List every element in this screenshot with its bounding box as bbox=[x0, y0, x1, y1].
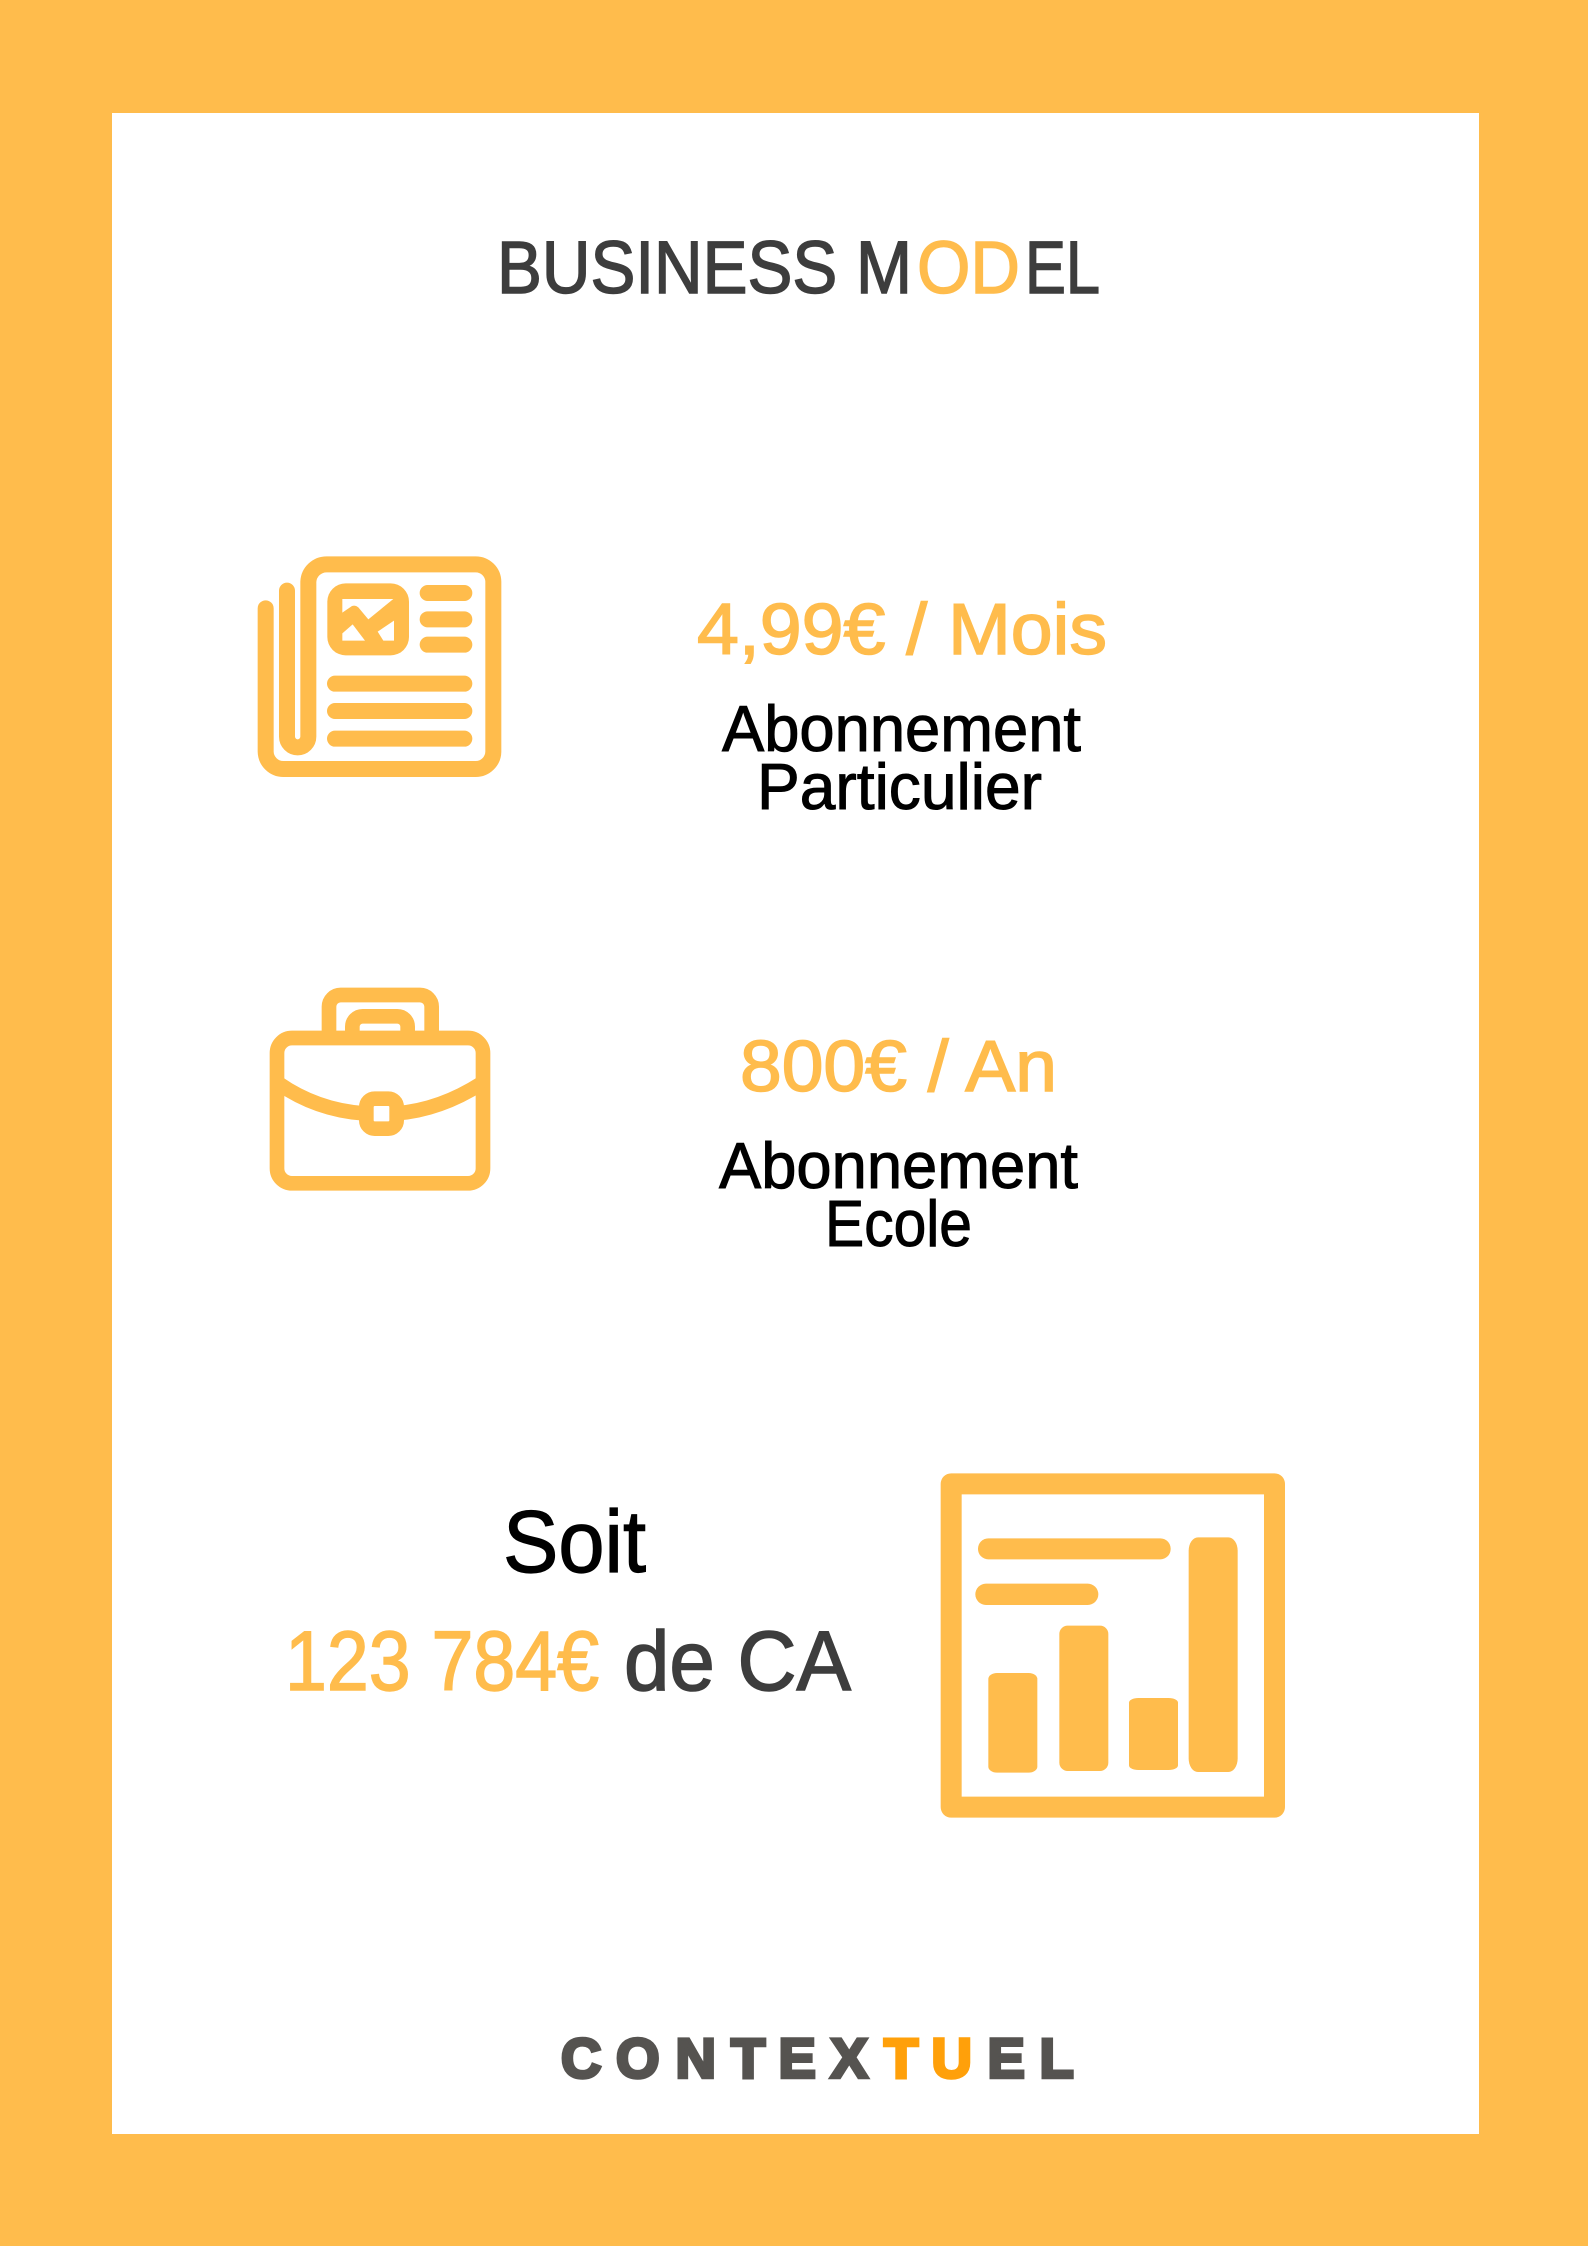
label: abonnement particulier: Particulier bbox=[757, 750, 1042, 823]
title: OD bbox=[917, 226, 1020, 309]
text: revenue: de CA bbox=[624, 1614, 851, 1708]
label: abonnement ecole: Abonnement bbox=[719, 1129, 1078, 1202]
title: BUSINESS M bbox=[497, 226, 912, 309]
text: soit: Soit bbox=[503, 1492, 646, 1591]
logo: contextuel: TU bbox=[884, 2026, 972, 2090]
label: abonnement ecole bbox=[719, 1129, 1078, 1260]
logo: contextuel: EL bbox=[988, 2026, 1074, 2090]
label: abonnement particulier: Abonnement bbox=[722, 692, 1081, 765]
text: revenue bbox=[285, 1614, 851, 1708]
panel: white card bbox=[112, 113, 1479, 2134]
icon: bar chart bbox=[951, 1484, 1274, 1807]
price: particulier: 4,99€ / Mois bbox=[697, 590, 1107, 670]
label: abonnement particulier bbox=[722, 692, 1081, 823]
title: EL bbox=[1025, 226, 1100, 309]
text: revenue: 123 784€ bbox=[285, 1614, 599, 1708]
icon: briefcase bbox=[277, 995, 483, 1183]
logo: contextuel: CONTEX bbox=[561, 2026, 868, 2090]
label: abonnement ecole: Ecole bbox=[825, 1187, 972, 1260]
price: ecole: 800€ / An bbox=[740, 1027, 1057, 1107]
icon: newspaper bbox=[266, 564, 493, 769]
